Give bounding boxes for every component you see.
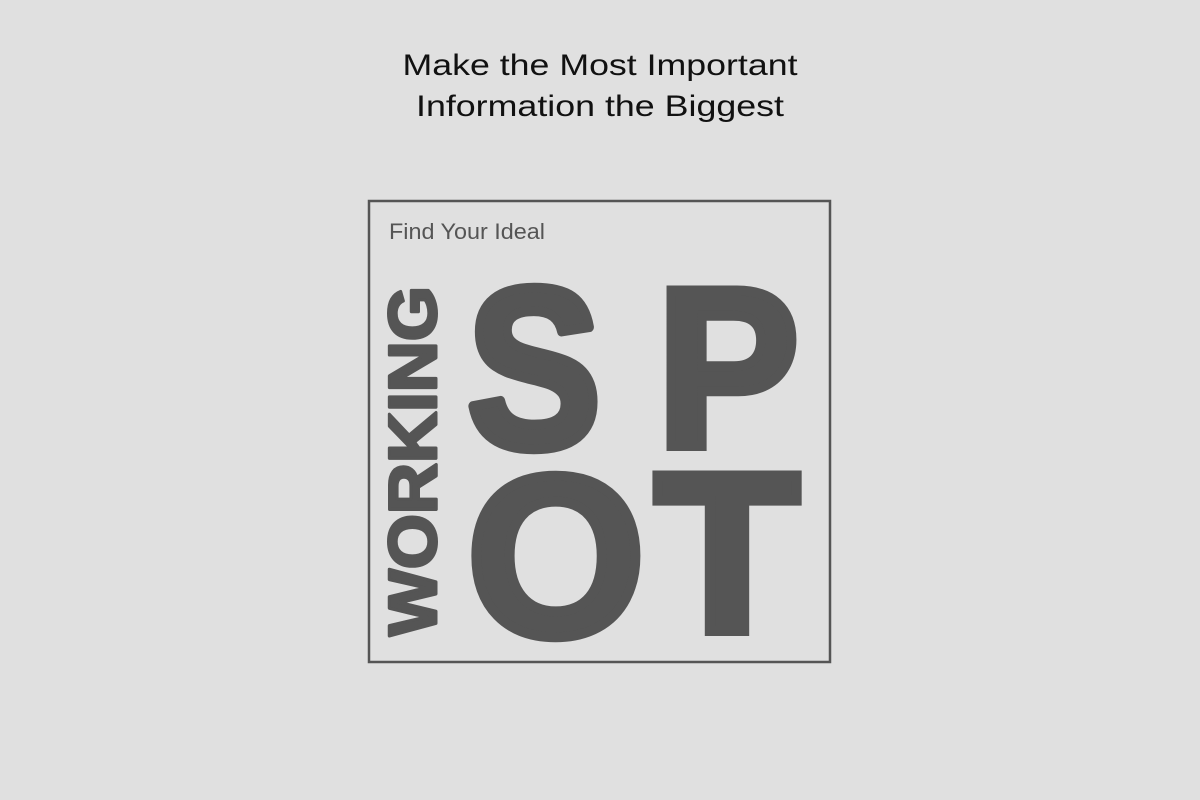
big letter O: O — [467, 430, 645, 684]
title: Information the Biggest — [416, 90, 785, 123]
big letter T: T — [655, 426, 799, 679]
title: Make the Most Important — [402, 49, 798, 82]
big letter P: P — [657, 241, 799, 494]
vertical word: WORKING: WORKING — [375, 286, 451, 636]
big letter S: S — [467, 242, 601, 496]
subtitle: Find Your Ideal: Find Your Ideal — [389, 219, 545, 244]
